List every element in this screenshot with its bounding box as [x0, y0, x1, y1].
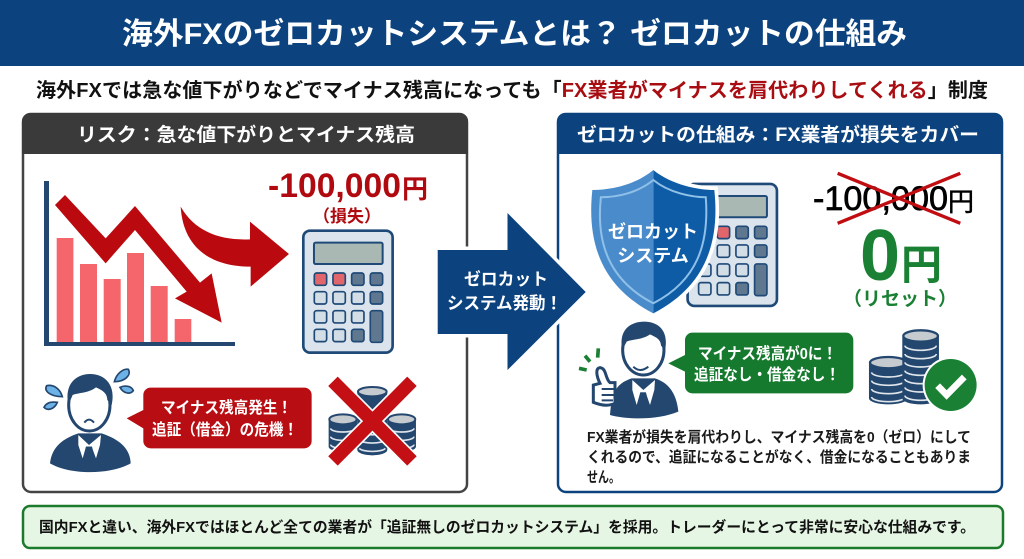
- speech bubble: danger: マイナス残高発生！: [161, 398, 292, 417]
- reset amount: （リセット）: [843, 288, 957, 310]
- explanation text: FX業者が損失を肩代わりし、マイナス残高を0（ゼロ）にして: [587, 428, 971, 446]
- icon: shield with label: [591, 170, 715, 313]
- speech bubble: relief: [668, 333, 853, 393]
- loss amount: （損失）: [313, 207, 381, 226]
- speech bubble: relief: マイナス残高が0に！: [698, 344, 837, 363]
- icon: worried trader: [44, 369, 133, 472]
- icon: crossed-out coins: [329, 381, 416, 461]
- icon: coins with check mark: [869, 330, 979, 413]
- arrow: zero-cut system activates: [438, 213, 586, 370]
- subtitle: 海外FXでは急な値下がりなどでマイナス残高になっても「FX業者がマイナスを肩代わりしてくれる」制度: [36, 78, 988, 102]
- loss amount: -100,000: [268, 167, 401, 205]
- reset amount: [843, 216, 957, 310]
- arrow: falling trend: [55, 195, 222, 323]
- icon: calculator: [303, 231, 393, 353]
- reset amount: 0: [860, 216, 900, 296]
- speech bubble: danger: [127, 388, 312, 448]
- crossed-out loss amount: 円: [948, 187, 974, 217]
- arrow: curved to calculator: [181, 207, 289, 287]
- title banner: [0, 0, 1024, 66]
- speech bubble: relief: 追証なし・借金なし！: [694, 365, 840, 384]
- panel: risk: [22, 113, 468, 492]
- mechanism panel heading: ゼロカットの仕組み：FX業者が損失をカバー: [577, 123, 979, 146]
- arrow: zero-cut system activates: システム発動！: [447, 294, 562, 313]
- icon: shield with label: システム: [617, 246, 689, 266]
- icon: calculator behind shield: [688, 184, 777, 306]
- panel: zero-cut mechanism: [557, 113, 1003, 492]
- explanation text: くれるので、追証になることがなく、借金になることもありま: [587, 448, 971, 466]
- loss amount: [268, 167, 428, 226]
- footer callout: [23, 506, 1003, 548]
- speech bubble: danger: 追証（借金）の危機！: [152, 420, 298, 439]
- bar chart: falling prices: [44, 181, 235, 346]
- icon: shield with label: ゼロカット: [608, 221, 698, 242]
- reset amount: 円: [901, 242, 942, 288]
- risk panel heading: リスク：急な値下がりとマイナス残高: [77, 123, 415, 146]
- explanation text: [587, 428, 971, 486]
- loss amount: 円: [402, 174, 428, 204]
- mechanism panel heading: [557, 113, 1003, 154]
- crossed-out loss amount: [813, 173, 974, 223]
- explanation text: せん。: [587, 469, 620, 486]
- arrow: zero-cut system activates: ゼロカット: [464, 269, 548, 289]
- footer callout: 国内FXと違い、海外FXではほとんど全ての業者が「追証無しのゼロカットシステム」を採用。トレーダーにとって非常に安心な仕組みです。: [39, 518, 975, 536]
- title banner: 海外FXのゼロカットシステムとは？ ゼロカットの仕組み: [122, 18, 907, 51]
- crossed-out loss amount: -100,000: [813, 180, 948, 218]
- risk panel heading: [22, 113, 468, 154]
- icon: happy trader thumbs up: [579, 322, 678, 418]
